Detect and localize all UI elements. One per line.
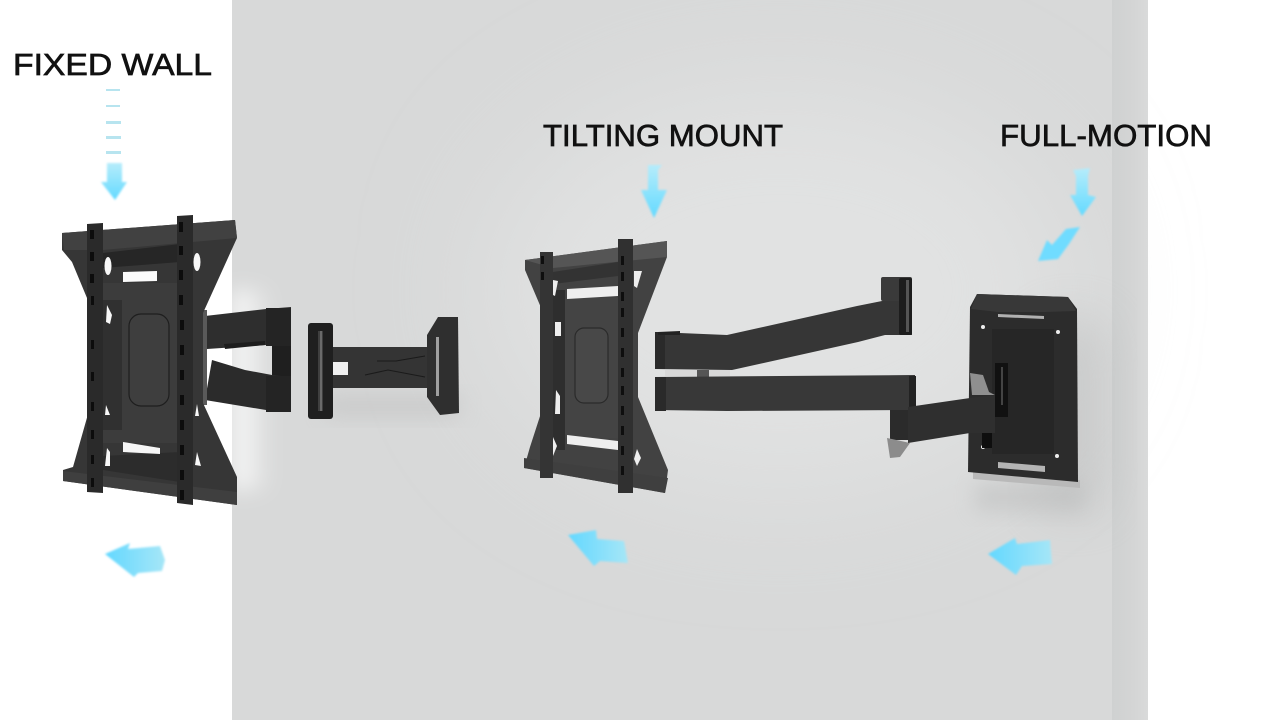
lower arm <box>655 375 915 411</box>
arrow: tilting mount bottom left <box>568 530 628 566</box>
bracket body <box>62 220 237 505</box>
arrow: fixed wall bottom left <box>105 543 165 577</box>
left rail <box>540 252 553 478</box>
left rail <box>87 223 103 493</box>
bracket cut-outs <box>553 271 642 466</box>
release latch <box>887 438 910 458</box>
arrow: tilting mount down <box>641 165 667 218</box>
plate body <box>968 294 1078 482</box>
upper window <box>567 286 618 299</box>
arrow: full-motion bottom left <box>988 538 1052 575</box>
hinge <box>308 323 333 419</box>
heading: full-motion: FULL-MOTION <box>1000 118 1212 153</box>
tilting mount: double arm <box>655 277 916 458</box>
connector <box>665 370 730 376</box>
lower window <box>123 442 160 454</box>
full-motion: forearm <box>908 373 995 443</box>
heading: fixed wall: FIXED WALL <box>13 47 212 82</box>
tilting mount: TV bracket <box>524 239 668 493</box>
rail holes <box>541 256 624 475</box>
rail holes <box>90 222 184 500</box>
arrow: full-motion diagonal <box>1038 227 1080 261</box>
full-motion: wall plate <box>968 294 1080 488</box>
screws <box>981 325 1060 458</box>
wall shadows and glow <box>232 290 1105 512</box>
fixed wall motion trail dots <box>106 89 121 154</box>
lower pivot <box>890 410 910 440</box>
right rail <box>177 215 193 505</box>
top hinge <box>881 277 912 301</box>
right rail <box>618 239 633 493</box>
arrow: fixed wall down <box>101 163 127 200</box>
upper arm <box>656 298 912 370</box>
arm bar <box>323 347 428 388</box>
center plate <box>565 298 618 438</box>
plate recess <box>129 314 169 406</box>
bracket body <box>524 241 668 493</box>
plate recess <box>575 328 608 403</box>
wall plate <box>427 317 459 415</box>
lower window <box>567 435 618 450</box>
gray clamp <box>970 373 995 395</box>
fixed wall mount: TV bracket <box>62 215 237 505</box>
fixed wall mount: arm <box>201 307 291 412</box>
top slot <box>998 314 1044 319</box>
bracket cut-outs <box>104 253 201 466</box>
detached swing arm <box>308 317 459 419</box>
center plate <box>103 283 180 443</box>
bottom slot <box>998 462 1045 472</box>
upper window <box>123 271 157 282</box>
arrow: full-motion down <box>1070 168 1096 216</box>
center latch <box>995 363 1008 417</box>
heading: tilting mount: TILTING MOUNT <box>543 118 783 153</box>
plate base strip <box>973 470 1080 488</box>
arm gap <box>323 362 348 375</box>
